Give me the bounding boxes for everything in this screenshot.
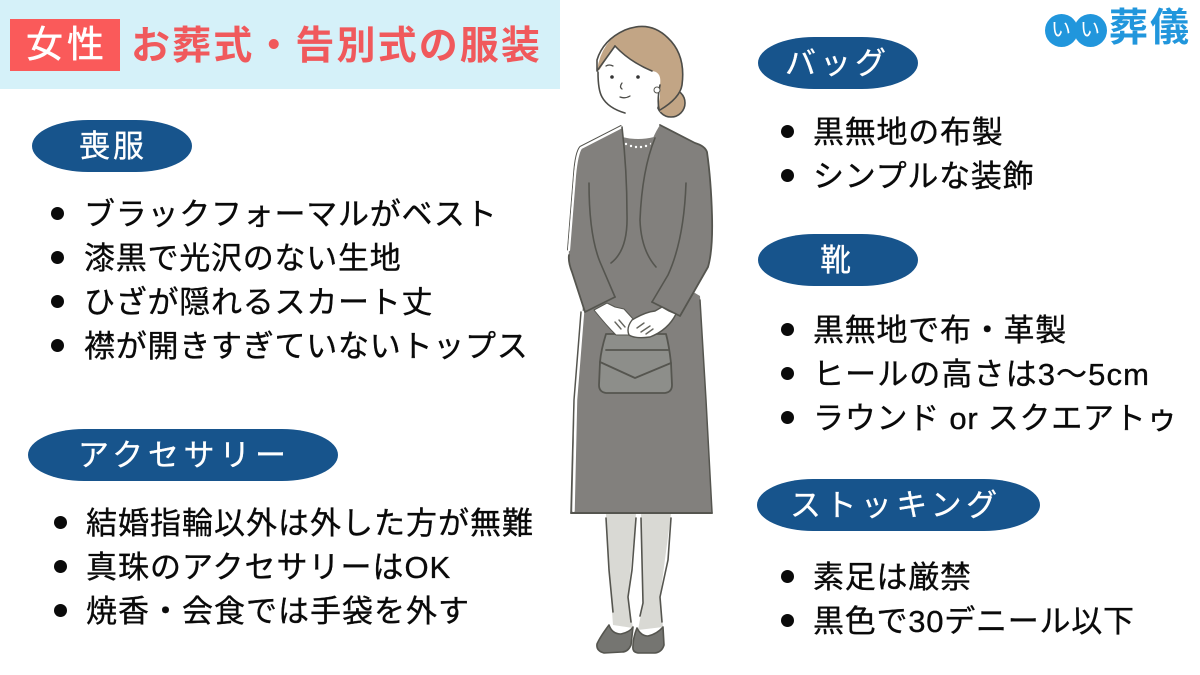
title tag: 女性: 女性 — [26, 24, 108, 65]
hair back and bun — [597, 26, 685, 117]
list: 喪服: ブラックフォーマルがベスト — [84, 197, 497, 232]
list: 喪服: 襟が開きすぎていないトップス — [84, 329, 528, 364]
list: ストッキング — [781, 560, 1135, 639]
list: ストッキング: 素足は厳禁 — [813, 560, 972, 595]
pearl necklace — [625, 143, 652, 148]
title heading: お葬式・告別式の服装 — [131, 25, 542, 68]
list: アクセサリー — [54, 506, 534, 629]
section heading: ストッキング: ストッキング — [790, 488, 1001, 523]
logo circles: いい — [1051, 19, 1109, 41]
list: 喪服: ひざが隠れるスカート丈 — [84, 285, 433, 320]
face — [598, 46, 660, 113]
list: アクセサリー: 真珠のアクセサリーはOK — [86, 550, 451, 585]
hands — [594, 303, 676, 338]
list: ストッキング: 黒色で30デニール以下 — [813, 604, 1135, 639]
list: バッグ: 黒無地の布製 — [813, 115, 1004, 150]
list: バッグ: シンプルな装飾 — [813, 159, 1034, 194]
section heading: 喪服: 喪服 — [79, 129, 147, 164]
list: アクセサリー: 結婚指輪以外は外した方が無難 — [86, 506, 534, 541]
list: 靴: ラウンド or スクエアトゥ — [813, 401, 1178, 436]
dress — [571, 137, 712, 513]
logo wordmark: 葬儀 — [1109, 7, 1191, 50]
list: 喪服: 漆黒で光沢のない生地 — [84, 241, 402, 276]
section heading: 靴 — [758, 234, 918, 286]
jacket — [568, 125, 712, 316]
list: アクセサリー: 焼香・会食では手袋を外す — [86, 594, 470, 629]
section heading: バッグ: バッグ — [785, 46, 890, 81]
handbag — [599, 334, 672, 393]
hair outline and earring — [597, 26, 683, 110]
section heading: ストッキング — [757, 479, 1040, 531]
logo circles — [1045, 14, 1109, 47]
list: 靴: ヒールの高さは3〜5cm — [813, 357, 1150, 392]
list: 靴 — [781, 313, 1178, 436]
title tag: 女性 — [10, 19, 120, 71]
logo: いい葬儀 — [1045, 7, 1191, 50]
section heading: アクセサリー: アクセサリー — [78, 438, 291, 473]
section heading: バッグ — [758, 37, 918, 89]
section heading: 靴: 靴 — [820, 243, 854, 278]
stockings — [606, 514, 671, 630]
shoes — [597, 625, 664, 653]
neck — [623, 105, 660, 145]
section heading: アクセサリー — [28, 429, 338, 481]
list: 喪服 — [51, 197, 528, 364]
list: バッグ — [781, 115, 1034, 194]
title banner — [0, 0, 560, 89]
section heading: 喪服 — [32, 120, 192, 172]
list: 靴: 黒無地で布・革製 — [813, 313, 1067, 348]
